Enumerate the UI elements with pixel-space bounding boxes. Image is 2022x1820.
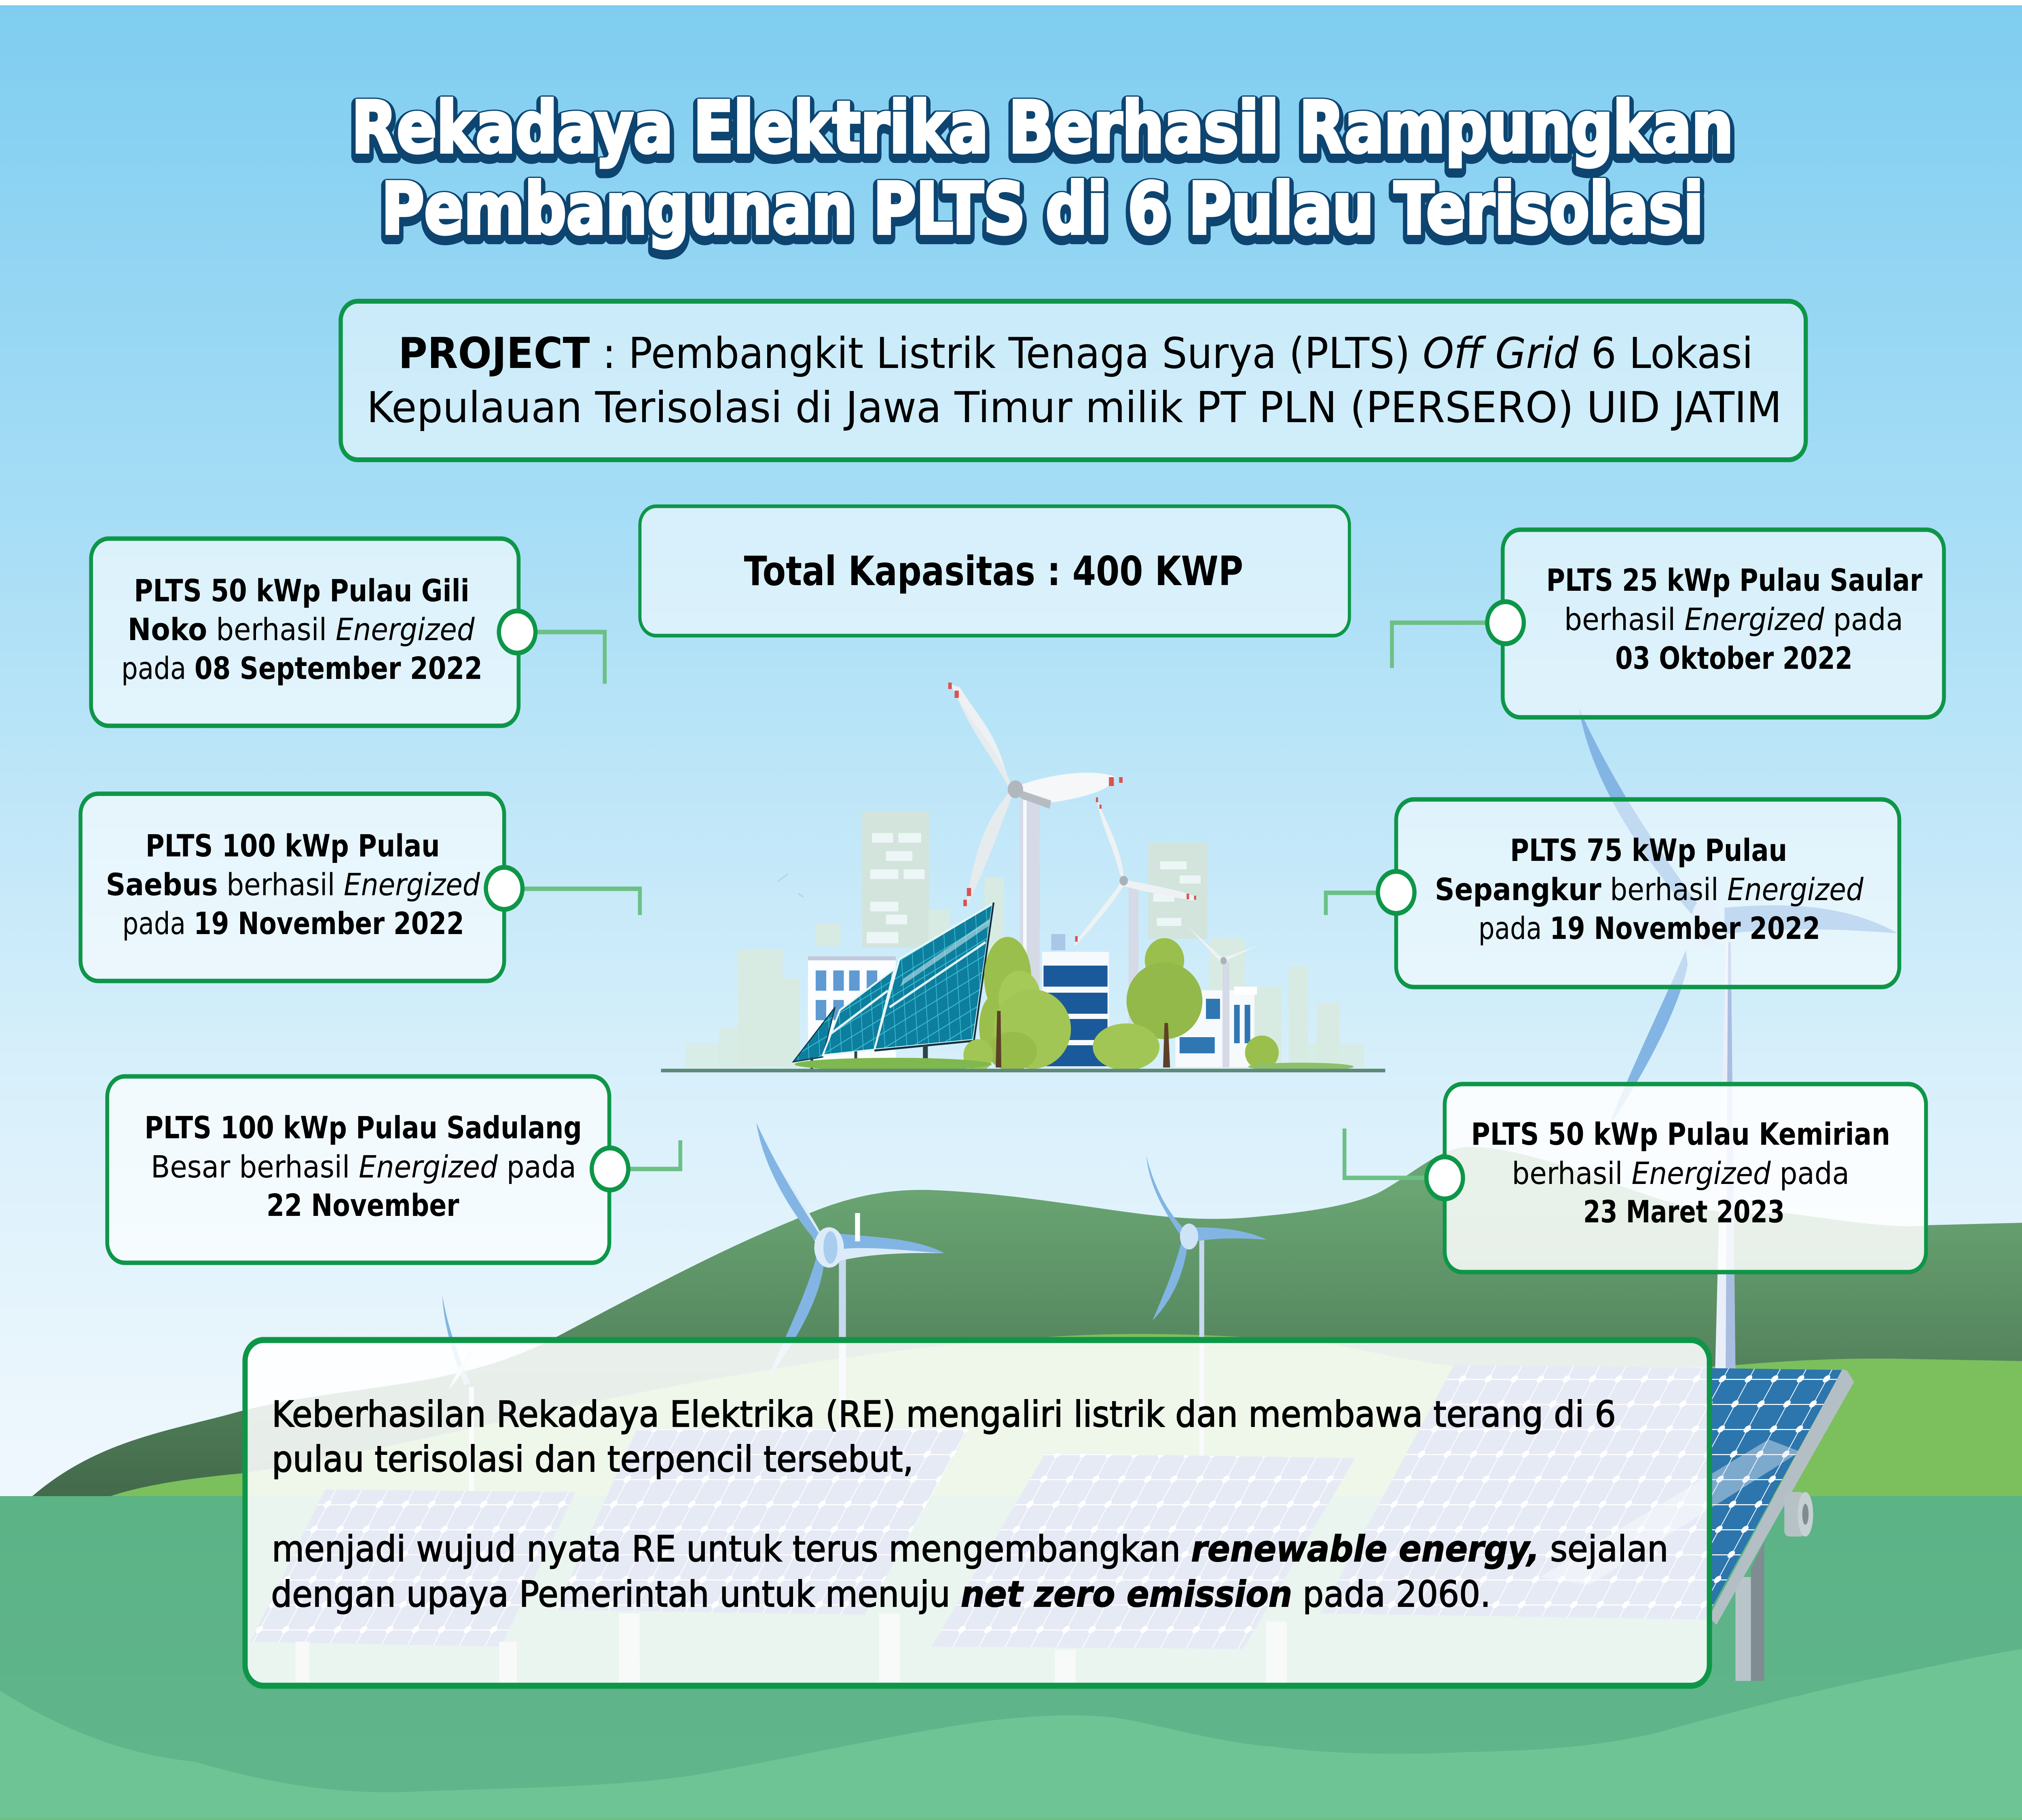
birds: [778, 874, 804, 897]
title: Pembangunan PLTS di 6 Pulau Terisolasi: [381, 168, 1703, 250]
photovoltaic panels: [793, 903, 994, 1070]
panel: Sepangkur: [1326, 799, 1899, 987]
panel: Gili Noko: PLTS 50 kWp Pulau Gili: [134, 573, 470, 609]
panel: Sadulang Besar: Besar berhasil Energized pada: [151, 1149, 576, 1185]
panel: Sadulang Besar: PLTS 100 kWp Pulau Sadulang: [144, 1110, 582, 1146]
panel: closing statement: pulau terisolasi dan terpencil tersebut,: [272, 1439, 914, 1480]
solar panel: centre, behind text box: [932, 1453, 1355, 1686]
panel: Kemirian: berhasil Energized pada: [1512, 1156, 1849, 1191]
main wind turbine: [948, 683, 1123, 1070]
panel: Saular: berhasil Energized pada: [1564, 602, 1903, 637]
title: Rekadaya Elektrika Berhasil Rampungkan: [351, 91, 1733, 173]
title: Rekadaya Elektrika Berhasil Rampungkan: [351, 87, 1733, 169]
panel: project description: [341, 301, 1806, 460]
wind turbine: large right: [1579, 708, 1897, 1373]
panel: Kemirian: 23 Maret 2023: [1583, 1194, 1785, 1230]
blue office building: [1042, 934, 1109, 1067]
panel: Sadulang Besar: [107, 1076, 680, 1263]
front green ground: [0, 1496, 2022, 1820]
title: Pembangunan PLTS di 6 Pulau Terisolasi: [381, 172, 1703, 254]
panel: closing statement: menjadi wujud nyata RE untuk terus mengembangkan renewable energy, sejalan: [272, 1528, 1668, 1570]
title: [351, 87, 1733, 254]
panel: closing statement: [245, 1340, 1709, 1686]
dark green hill: [32, 1147, 2022, 1504]
building windows on pale towers: [867, 833, 1201, 943]
panel: Saebus: PLTS 100 kWp Pulau: [146, 828, 440, 864]
foreground wave: [0, 1649, 2022, 1820]
panel: Saebus: pada 19 November 2022: [123, 906, 464, 941]
wind turbine: centre right: [1146, 1155, 1267, 1463]
wind turbine: far left: [442, 1295, 474, 1496]
ground line: [661, 1069, 1385, 1072]
panel: Gili Noko: pada 08 September 2022: [121, 651, 482, 686]
solar panel: large right with support post: [1320, 1365, 1854, 1681]
panel: total capacity: Total Kapasitas : 400 KWP: [744, 548, 1243, 595]
solar panel: left, behind text box: [250, 1490, 575, 1686]
panel: Gili Noko: Noko berhasil Energized: [128, 612, 475, 647]
panel: Sadulang Besar: 22 November: [266, 1188, 459, 1223]
panel: Saular: [1392, 530, 1944, 717]
bottom edge strip: [0, 1818, 2022, 1820]
panel: Sepangkur: Sepangkur berhasil Energized: [1435, 872, 1864, 907]
panel: Sepangkur: pada 19 November 2022: [1478, 911, 1820, 946]
skyline: pale background buildings: [685, 812, 1364, 1067]
white office building with windows: [808, 956, 896, 1065]
wind turbine: centre left: [756, 1122, 944, 1494]
light green hill: [110, 1334, 2022, 1504]
panel: project description: PROJECT : Pembangkit Listrik Tenaga Surya (PLTS) Off Grid 6 Lokasi: [398, 329, 1753, 378]
third wind turbine: [1188, 926, 1259, 1067]
panel: Saebus: [80, 794, 640, 981]
panel: project description: Kepulauan Terisolasi di Jawa Timur milik PT PLN (PERSERO) UID JATIM: [367, 383, 1782, 433]
second wind turbine: [1073, 797, 1196, 1067]
panel: Saular: PLTS 25 kWp Pulau Saular: [1546, 562, 1923, 598]
panel: Saebus: Saebus berhasil Energized: [106, 867, 480, 903]
panel: Sepangkur: PLTS 75 kWp Pulau: [1510, 833, 1787, 868]
panel: Kemirian: PLTS 50 kWp Pulau Kemirian: [1471, 1116, 1890, 1152]
panel: closing statement: Keberhasilan Rekadaya Elektrika (RE) mengaliri listrik dan membawa terang di 6: [272, 1394, 1616, 1435]
panel: Saular: 03 Oktober 2022: [1615, 640, 1853, 676]
illustration: city, wind turbines and solar panels: [661, 683, 1385, 1072]
panel: total capacity: [640, 506, 1349, 636]
right white building with windows: [1175, 987, 1257, 1067]
panel: Gili Noko: [91, 539, 605, 726]
trees: [795, 937, 1354, 1072]
panel: closing statement: dengan upaya Pemerintah untuk menuju net zero emission pada 2060.: [271, 1574, 1491, 1615]
panel: Kemirian: [1345, 1084, 1926, 1272]
solar panel: middle, behind text box: [556, 1429, 969, 1682]
